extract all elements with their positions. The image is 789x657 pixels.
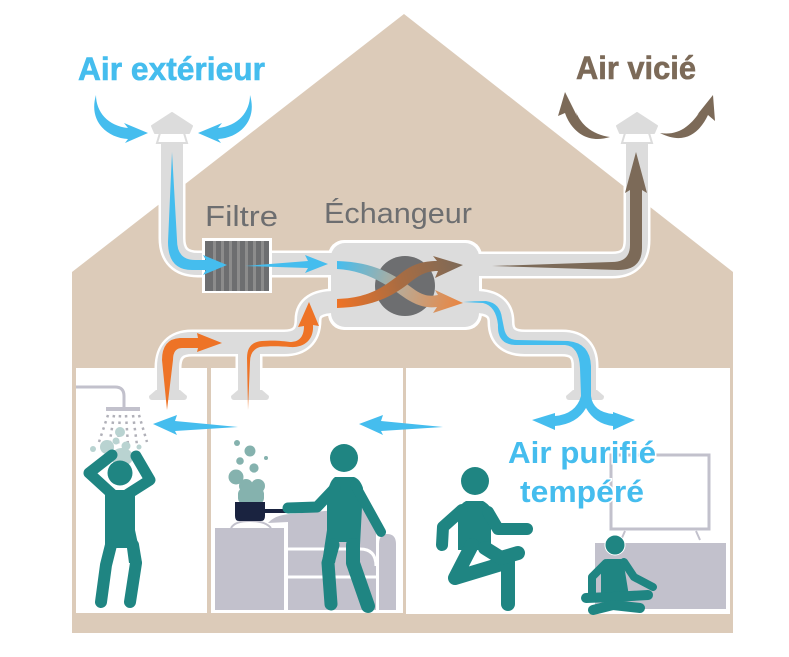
sofa back: [268, 508, 376, 610]
arrow: outside air curving left: [94, 95, 148, 143]
duct flanges: [149, 390, 604, 400]
person: stretching: [442, 467, 527, 604]
arrow: air from living room to kitchen: [359, 415, 443, 435]
sofa arm: [379, 534, 396, 610]
burner: [231, 521, 271, 528]
tv screen: [611, 455, 709, 529]
heading: purified tempered air: tempéré: [520, 474, 644, 509]
shower head: [106, 407, 140, 411]
filter: [202, 238, 272, 293]
heading: stale air: Air vicié: [576, 50, 696, 86]
arrow: extraction from bathroom: [162, 333, 222, 410]
room: bathroom: [76, 368, 207, 613]
arrow: air from kitchen to bathroom: [153, 415, 238, 435]
shower pipe: [76, 387, 124, 408]
room: kitchen: [211, 368, 403, 613]
person: cooking: [288, 444, 381, 606]
label: exchanger: Échangeur: [324, 197, 472, 230]
stove counter: [212, 525, 287, 613]
arrow: outside air curving right: [198, 95, 252, 143]
shower: [76, 387, 147, 466]
heading: outside air: Air extérieur: [78, 51, 265, 87]
house silhouette: [72, 14, 733, 633]
rooms: [76, 368, 730, 614]
arrow: filter to exchanger: [245, 255, 328, 273]
heading: purified tempered air: [508, 435, 656, 509]
cooking steam: [228, 440, 268, 504]
cooking pot: [235, 502, 288, 521]
arrow: exhaust curving left: [558, 92, 610, 139]
duct outlines: [168, 142, 637, 368]
water droplets: [99, 415, 147, 447]
tv legs: [621, 531, 700, 540]
arrow: intake through exchanger: [337, 261, 463, 313]
person: showering: [89, 455, 150, 602]
roof cap: exhaust: [617, 113, 657, 143]
arrow: supply air to living room: [463, 301, 635, 430]
arrow: exhaust curving right: [660, 95, 715, 138]
tv cabinet: [595, 543, 726, 609]
arrow: exhaust to roof: [492, 152, 647, 270]
sofa cushion lines: [288, 549, 376, 577]
label: filter: Filtre: [205, 201, 278, 233]
room: living room: [406, 368, 730, 614]
heading: purified tempered air: Air purifié: [508, 435, 656, 470]
person: sitting cross-legged: [586, 535, 653, 610]
steam bubbles: [90, 427, 142, 466]
arrow: extraction from kitchen: [247, 302, 319, 410]
exchanger box: [328, 240, 482, 330]
television: [611, 455, 709, 540]
kitchen furniture: [212, 508, 396, 613]
arrow: intake air through duct: [168, 152, 227, 275]
duct fill: [168, 142, 637, 395]
arrow: stale air through exchanger: [337, 256, 463, 308]
exchanger core: [375, 256, 435, 316]
roof cap: intake: [152, 113, 192, 143]
